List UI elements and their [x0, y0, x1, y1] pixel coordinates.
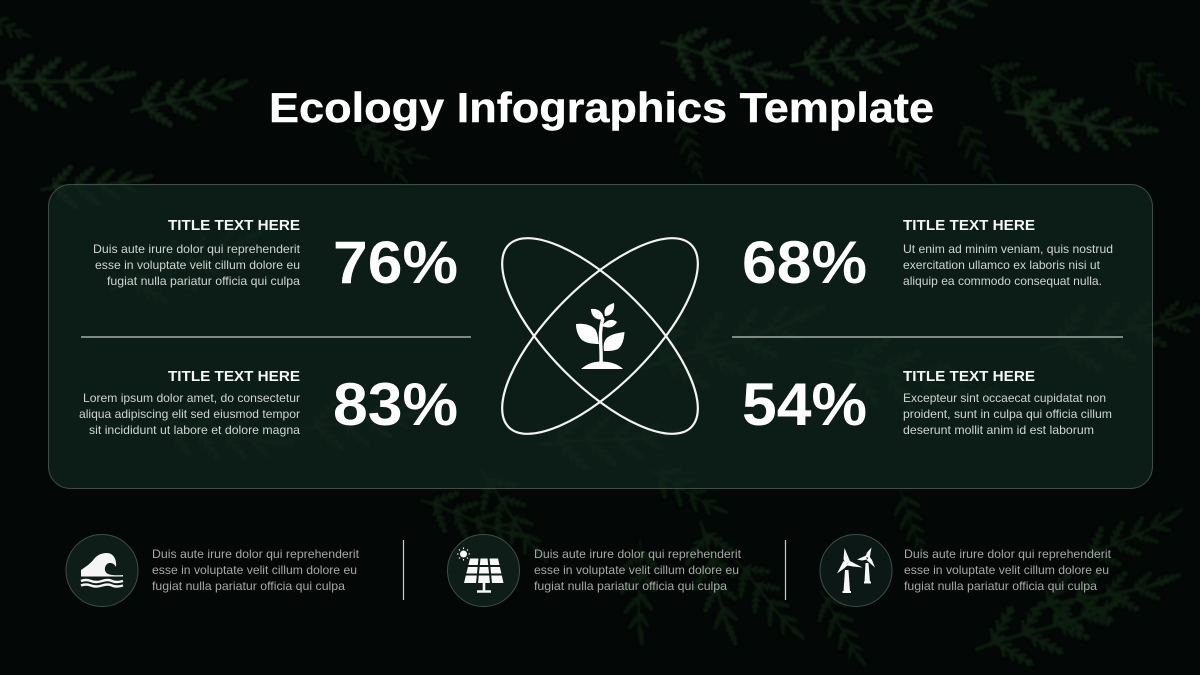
stat: 54 percent — [742, 368, 1112, 438]
stat: 68 percent: exercitation ullamco ex laboris nisi ut — [903, 258, 1101, 272]
stat: 54 percent: 54% — [742, 371, 867, 438]
text block: Duis aute irure dolor qui reprehenderit — [152, 547, 360, 561]
feature: ocean wave — [66, 534, 360, 606]
stat: 54 percent: proident, sunt in culpa qui officia cillum — [903, 407, 1112, 421]
stat: 76 percent: 76% — [333, 229, 458, 296]
title: Ecology Infographics Template — [269, 84, 934, 131]
stat: 76 percent: TITLE TEXT HERE — [168, 217, 300, 234]
stat: 68 percent: 68% — [742, 229, 867, 296]
feature: wind turbines — [820, 534, 1112, 606]
stat: 54 percent: deserunt mollit anim id est laborum — [903, 423, 1094, 437]
stat: 83 percent: aliqua adipiscing elit sed eiusmod tempor — [79, 407, 300, 421]
stat: 83 percent: sit incididunt ut labore et dolore magna — [89, 423, 300, 437]
feature: solar panel — [448, 534, 742, 606]
stat: 83 percent: 83% — [333, 371, 458, 438]
stat: 68 percent: TITLE TEXT HERE — [903, 217, 1035, 234]
text block: esse in voluptate velit cillum dolore eu — [534, 563, 739, 577]
stat: 54 percent: TITLE TEXT HERE — [903, 368, 1035, 385]
stat: 83 percent — [79, 368, 458, 438]
text block — [534, 547, 742, 593]
stat: 83 percent: Lorem ipsum dolor amet, do consectetur — [83, 391, 300, 405]
stat: 54 percent: Excepteur sint occaecat cupidatat non — [903, 391, 1106, 405]
text block: Duis aute irure dolor qui reprehenderit — [534, 547, 742, 561]
stat: 76 percent: esse in voluptate velit cillum dolore eu — [95, 258, 300, 272]
stat: 76 percent: Duis aute irure dolor qui reprehenderit — [93, 242, 301, 256]
text block: fugiat nulla pariatur officia qui culpa — [534, 579, 727, 593]
text block: fugiat nulla pariatur officia qui culpa — [152, 579, 345, 593]
text block: Duis aute irure dolor qui reprehenderit — [904, 547, 1112, 561]
text block — [152, 547, 360, 593]
text block: esse in voluptate velit cillum dolore eu — [904, 563, 1109, 577]
icon: solar panel — [448, 534, 520, 606]
stat: 83 percent: TITLE TEXT HERE — [168, 368, 300, 385]
text block: fugiat nulla pariatur officia qui culpa — [904, 579, 1097, 593]
stat: 68 percent — [742, 217, 1113, 296]
stat: 68 percent: Ut enim ad minim veniam, quis nostrud — [903, 242, 1113, 256]
panel: statistics — [48, 184, 1152, 488]
icon: sprouting plant — [576, 303, 624, 369]
stat: 76 percent: fugiat nulla pariatur officia qui culpa — [107, 274, 300, 288]
stat: 76 percent — [93, 217, 458, 296]
stat: 68 percent: aliquip ea commodo consequat nulla. — [903, 274, 1102, 288]
text block — [904, 547, 1112, 593]
icon: orbit ellipses with plant — [473, 209, 727, 463]
text block: esse in voluptate velit cillum dolore eu — [152, 563, 357, 577]
icon: wind turbines — [820, 534, 892, 606]
icon: wave — [66, 534, 138, 606]
